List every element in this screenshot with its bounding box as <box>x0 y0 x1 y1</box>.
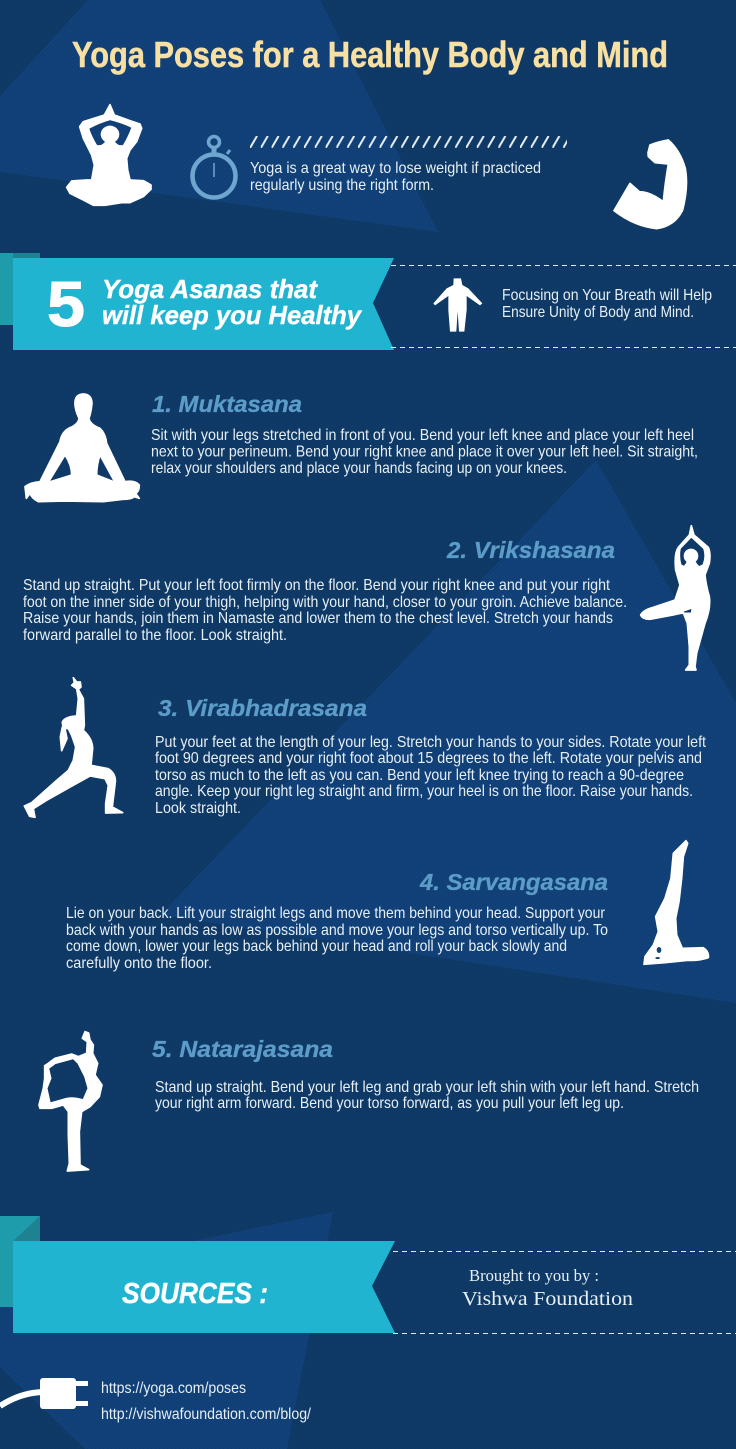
source links: https://yoga.com/poses <box>101 1380 246 1397</box>
source links: http://vishwafoundation.com/blog/ <box>101 1406 311 1423</box>
background triangle: top <box>0 0 438 232</box>
heading: Sarvangasana: 4. Sarvangasana <box>419 869 608 895</box>
icon: Virabhadrasana pose <box>24 678 123 817</box>
text: Sarvangasana <box>66 905 608 972</box>
heading: Natarajasana: 5. Natarajasana <box>152 1036 333 1062</box>
credit: Brought to you by : <box>469 1266 599 1285</box>
icon: Muktasana pose <box>25 394 139 502</box>
sources heading: SOURCES : <box>122 1278 268 1310</box>
ribbon heading: will keep you Healthy <box>102 300 363 330</box>
heading: Muktasana: 1. Muktasana <box>152 391 302 417</box>
heading: Vrikshasana: 2. Vrikshasana <box>446 537 615 563</box>
breath text: Focusing on Your Breath will Help <box>502 287 712 304</box>
intro text: Yoga is a great way to lose weight if practiced <box>250 160 541 177</box>
intro text <box>250 160 541 194</box>
ribbon heading: Yoga Asanas that <box>102 274 318 304</box>
text: Muktasana: relax your shoulders and place your hands facing up on your knees. <box>151 460 567 477</box>
text: Sarvangasana: Lie on your back. Lift your straight legs and move them behind your head. Support your <box>66 905 606 922</box>
text: Sarvangasana: carefully onto the floor. <box>66 955 212 972</box>
credit <box>462 1266 633 1310</box>
icon: seated meditation figure <box>67 105 151 205</box>
text: Vrikshasana: Raise your hands, join them in Namaste and lower them to the chest level. Stretch your hands <box>23 610 613 627</box>
text: Vrikshasana: forward parallel to the floor. Look straight. <box>23 627 287 644</box>
text: Vrikshasana: Stand up straight. Put your left foot firmly on the floor. Bend your right knee and put your right <box>23 577 610 594</box>
text: Vrikshasana: foot on the inner side of your thigh, helping with your hand, closer to your groin. Achieve balance. <box>23 594 627 611</box>
icon: plug <box>0 1378 88 1409</box>
text: Sarvangasana: back with your hands as low as possible and move your legs and torso vertically up. To <box>66 922 608 939</box>
text: Muktasana <box>151 427 698 477</box>
icon: stopwatch <box>192 136 236 198</box>
decorative slashes <box>250 136 567 148</box>
ribbon: sources <box>0 1216 395 1333</box>
breath text <box>502 287 712 321</box>
intro text: regularly using the right form. <box>250 177 434 194</box>
credit: Vishwa Foundation <box>462 1288 633 1310</box>
big number 5: 5 <box>47 268 85 340</box>
icon: Sarvangasana pose <box>644 841 708 964</box>
heading: Virabhadrasana: 3. Virabhadrasana <box>158 695 367 721</box>
background triangle: middle <box>160 460 736 1003</box>
text: Virabhadrasana: torso as much to the left as you can. Bend your left knee trying to reach a 90-degree <box>155 767 684 784</box>
icon: standing body <box>433 278 482 332</box>
icon: Vrikshasana pose <box>641 526 710 670</box>
text: Vrikshasana <box>23 577 627 644</box>
text: Natarajasana <box>155 1079 699 1112</box>
ribbon: 5 Yoga Asanas <box>0 253 394 350</box>
icon: Natarajasana pose <box>39 1032 102 1171</box>
text: Virabhadrasana <box>155 734 706 817</box>
text: Natarajasana: your right arm forward. Bend your torso forward, as you pull your left leg up. <box>155 1095 624 1112</box>
icon: flexed arm <box>614 140 687 229</box>
source links <box>101 1380 311 1423</box>
ribbon heading <box>102 274 363 330</box>
breath text: Ensure Unity of Body and Mind. <box>502 304 694 321</box>
text: Sarvangasana: come down, lower your legs back behind your head and roll your back slowly and <box>66 938 567 955</box>
background triangle: bottom <box>0 1212 333 1449</box>
text: Virabhadrasana: Look straight. <box>155 800 241 817</box>
